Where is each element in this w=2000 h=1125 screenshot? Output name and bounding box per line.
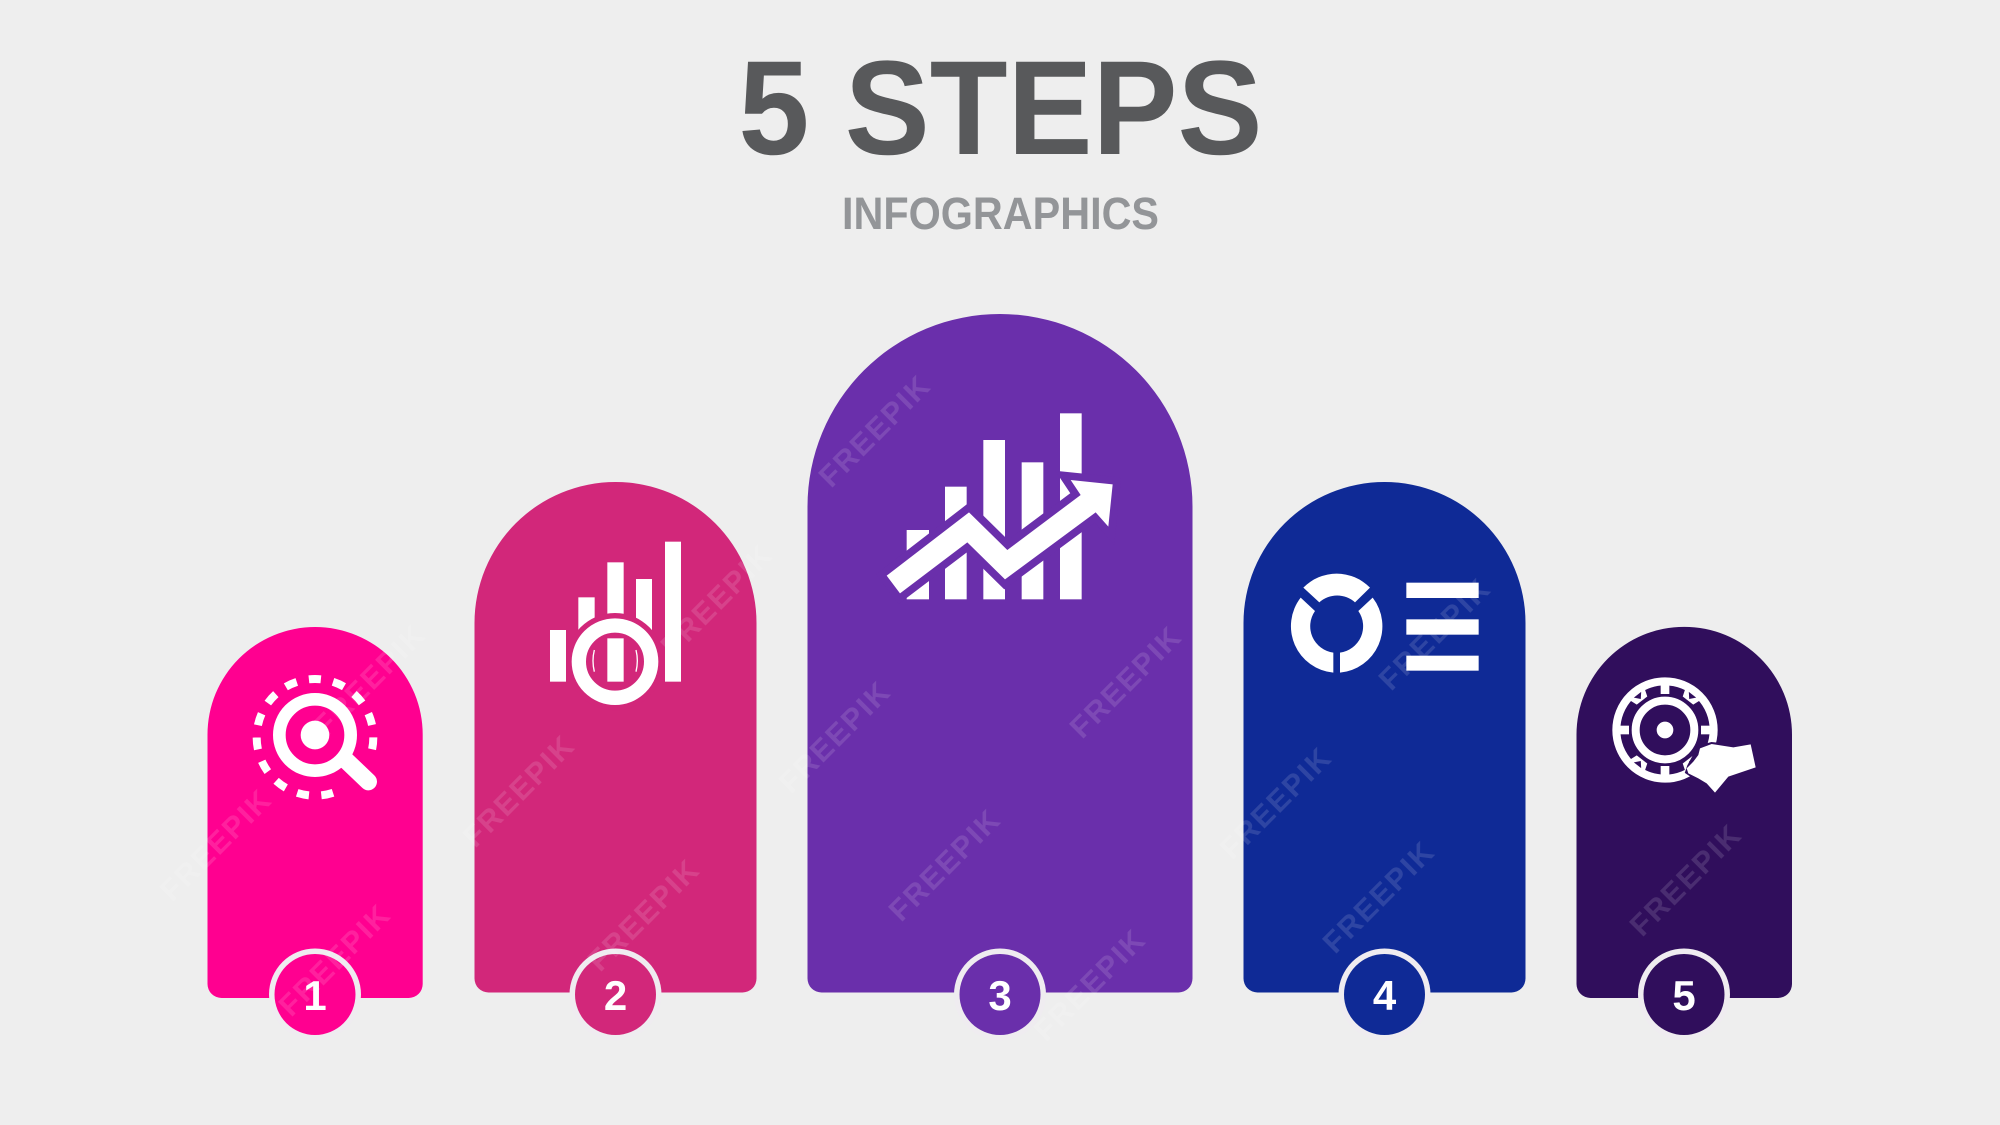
text: FREEPIK (1624, 818, 1749, 943)
number badge 3 (954, 948, 1046, 1040)
panel shape 2 (474, 482, 756, 992)
number badge 1 (269, 948, 361, 1040)
text: FREEPIK (154, 783, 279, 908)
panel: step 5 (1576, 627, 1792, 1040)
panel shape 4 (1244, 482, 1526, 992)
text: FREEPIK (308, 618, 433, 743)
text: FREEPIK (1028, 923, 1153, 1048)
text: FREEPIK (813, 369, 938, 494)
panel: step 1 (208, 627, 423, 1040)
subtitle: INFOGRAPHICS (842, 188, 1159, 239)
text: FREEPIK (773, 675, 898, 800)
icon: bar chart with magnifier ring (550, 542, 681, 710)
text: FREEPIK (273, 898, 398, 1023)
text: FREEPIK (457, 729, 582, 854)
text: FREEPIK (582, 853, 707, 978)
number badge 2 (570, 948, 662, 1040)
panel shape 1 (208, 627, 423, 998)
title: 5 STEPS (738, 34, 1262, 183)
number badge 3: 3 (988, 972, 1012, 1019)
text: FREEPIK (883, 803, 1008, 928)
icon: magnifier with dashed circle (241, 664, 389, 811)
panel shape 5 (1576, 627, 1792, 998)
panel: step 2 (474, 482, 756, 1040)
icon: donut chart with list (1291, 574, 1479, 673)
number badge 4 (1338, 948, 1430, 1040)
text: FREEPIK (1214, 741, 1339, 866)
number badge 1: 1 (303, 972, 327, 1019)
text: FREEPIK (1064, 620, 1189, 745)
text: FREEPIK (655, 538, 780, 663)
number badge 4: 4 (1373, 972, 1397, 1019)
number badge 2: 2 (604, 972, 627, 1019)
text: FREEPIK (1373, 572, 1498, 697)
panel shape 3 (808, 314, 1192, 992)
number badge 5: 5 (1672, 972, 1696, 1019)
text: FREEPIK (1317, 835, 1442, 960)
panel: step 4 (1244, 482, 1526, 1040)
icon: rising bar chart with arrow (887, 413, 1113, 599)
icon: gear with hand (1616, 681, 1756, 793)
number badge 5 (1638, 948, 1730, 1040)
panel: step 3 (808, 314, 1192, 1040)
